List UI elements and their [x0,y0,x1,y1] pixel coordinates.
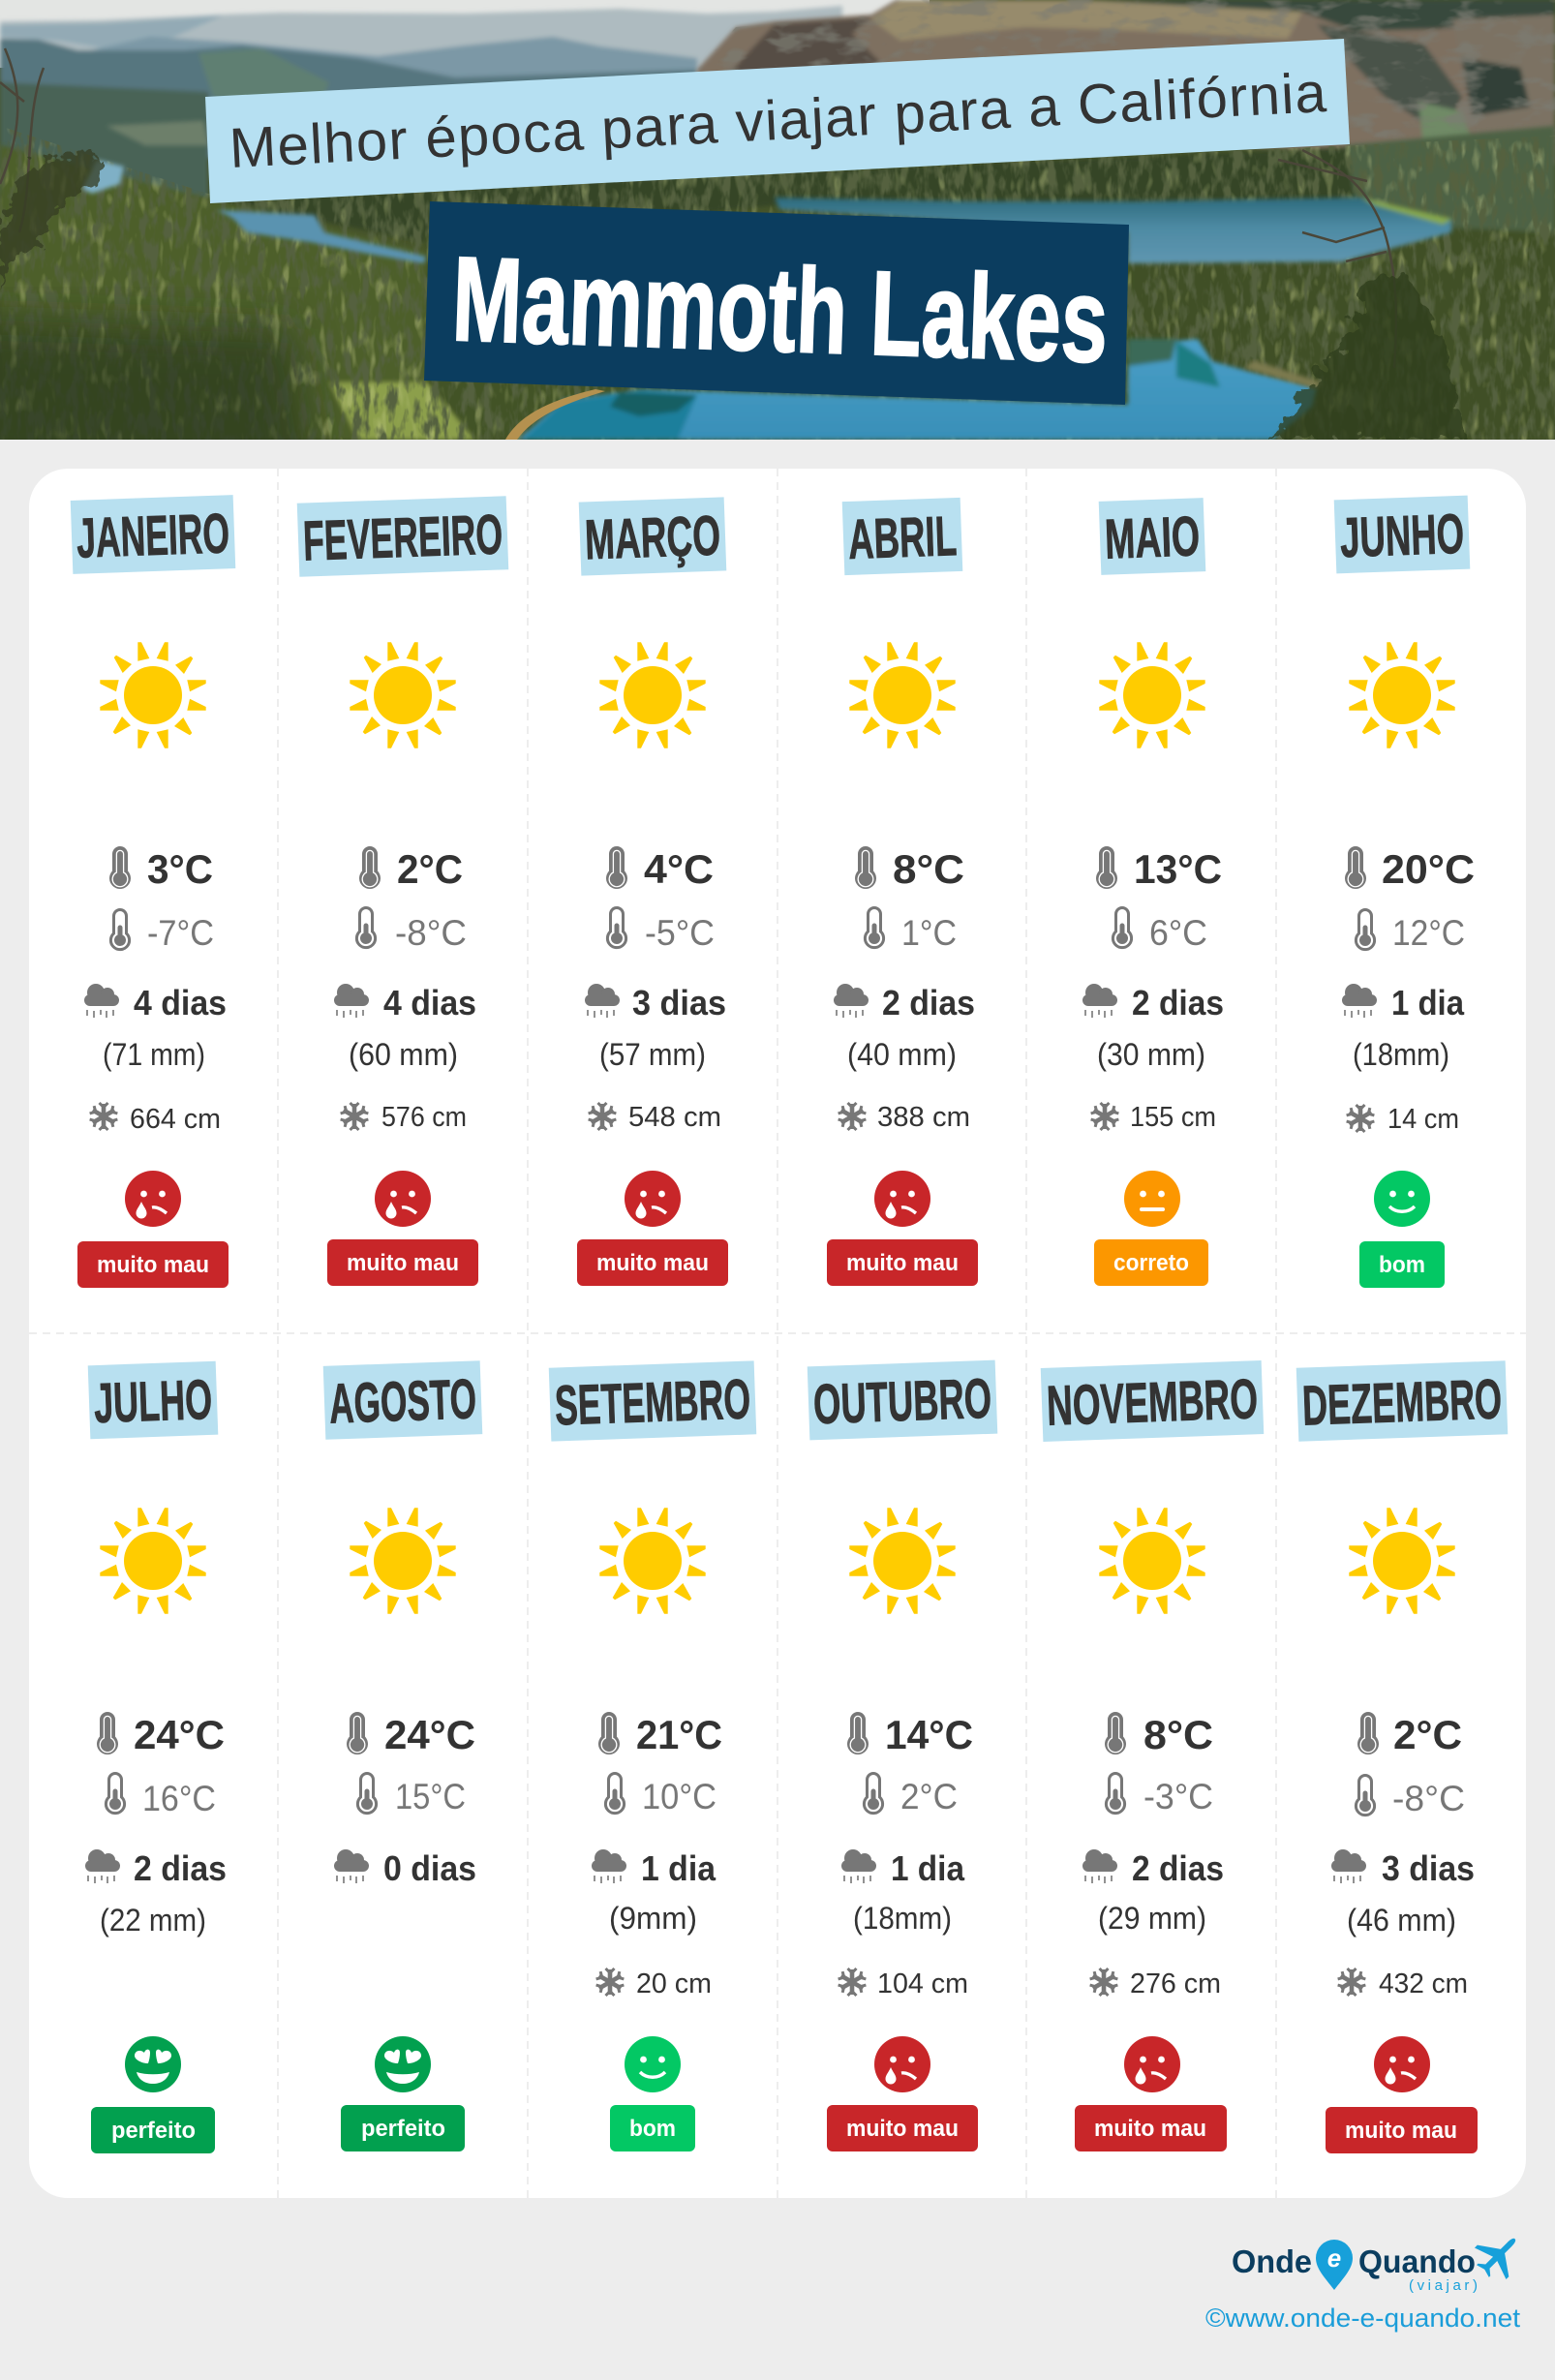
icon: thermometer high [1345,846,1366,889]
icon: thermometer low [1356,1776,1375,1816]
rainfall: (71 mm) [103,1037,205,1072]
rain days: 4 dias [383,983,476,1022]
destination heading [424,201,1129,405]
panel: outubro [808,1360,997,2151]
foreground tree left [0,48,45,184]
rating badge: muito mau [596,1250,709,1276]
icon: thermometer high [606,846,627,889]
high temperature: 20°C [1382,846,1475,892]
month heading [549,1360,756,1442]
icon: rating face [874,2036,930,2092]
icon: thermometer high [97,1712,118,1754]
rating badge [1094,1239,1208,1286]
low temperature: -7°C [147,913,214,953]
panel: julho [85,1361,227,2153]
icon: rating face [1374,2036,1430,2092]
rating badge: muito mau [347,1250,459,1276]
high temperature: 21°C [636,1712,722,1757]
icon: thermometer high [855,846,876,889]
icon: snow [596,1968,624,1996]
rain days: 2 dias [134,1848,227,1888]
low temperature: 6°C [1149,913,1207,953]
month heading [1334,496,1470,573]
icon: rain [1331,1849,1366,1883]
month heading [808,1360,997,1440]
rating badge: muito mau [97,1252,209,1278]
high temperature: 13°C [1134,846,1222,892]
logo: Onde e Quando [1232,2223,1531,2294]
rating badge: perfeito [111,2118,196,2144]
panel: janeiro [71,495,235,1288]
icon: sun [599,1508,706,1614]
low temperature: -8°C [1392,1779,1465,1818]
low temperature: 16°C [142,1779,216,1818]
icon: rating face [1124,2036,1180,2092]
snowfall: 432 cm [1379,1968,1468,1999]
month heading [71,495,235,574]
high temperature: 2°C [397,846,463,892]
low temperature: -5°C [645,913,715,953]
low temperature: 12°C [1392,913,1465,953]
snowfall: 14 cm [1387,1104,1459,1135]
icon: thermometer high [598,1712,620,1754]
month heading: ABRIL [847,504,958,571]
icon: thermometer high [1357,1712,1379,1754]
rain days: 4 dias [134,983,227,1022]
month heading [1041,1360,1264,1442]
high temperature: 3°C [147,846,213,892]
high temperature: 4°C [644,846,714,892]
rating badge: perfeito [361,2116,445,2142]
month heading: NOVEMBRO [1046,1367,1259,1438]
icon: rating face [1374,1171,1430,1227]
foreground tree right [1278,149,1394,277]
icon: thermometer high [109,846,131,889]
snowfall: 664 cm [130,1104,221,1135]
icon: sun [599,642,706,748]
icon: sun [1099,1508,1205,1614]
low temperature: -3°C [1143,1777,1213,1816]
forest texture [0,128,1555,440]
icon: sun [350,642,456,748]
icon: rain [84,984,119,1018]
month heading [579,497,726,576]
icon: rain [841,1849,876,1883]
destination name: Mammoth Lakes [450,232,1110,388]
rating badge [327,1239,478,1286]
rainfall: (30 mm) [1097,1037,1205,1072]
rating badge: muito mau [846,2116,959,2142]
month heading [297,496,508,577]
icon: thermometer high [1096,846,1117,889]
icon: plane [1467,2223,1531,2287]
icon: rain [85,1849,120,1883]
snowfall: 388 cm [877,1102,970,1133]
high temperature: 8°C [1143,1712,1213,1757]
panel: calendar card [29,469,1526,2198]
title text: Melhor época para viajar para a Califórnia [228,61,1328,180]
icon: snow [1347,1105,1374,1132]
icon: rain [585,984,620,1018]
rating badge [1326,2107,1478,2153]
low temperature: 1°C [901,913,957,953]
icon: snow [838,1103,866,1130]
snowfall: 276 cm [1130,1968,1221,1999]
icon: rating face [874,1171,930,1227]
website url: ©www.onde-e-quando.net [1205,2304,1521,2333]
rating badge: bom [629,2116,676,2142]
lakes [82,160,1452,440]
icon: thermometer low [605,1774,625,1814]
high temperature: 24°C [134,1712,225,1757]
icon: thermometer low [110,910,130,950]
icon: thermometer low [865,908,884,948]
snowfall: 548 cm [628,1102,721,1133]
low temperature: -8°C [395,913,467,953]
icon: rain [334,1849,369,1883]
low temperature: 15°C [395,1777,466,1816]
panel: novembro [1041,1360,1264,2151]
icon: map pin [1316,2240,1353,2290]
month heading: JANEIRO [76,502,230,570]
rating badge [827,1239,978,1286]
month heading: AGOSTO [328,1367,477,1436]
logo: Onde e Quando: Onde [1232,2243,1312,2279]
month heading [842,498,962,575]
month heading [323,1360,482,1440]
rainfall: (60 mm) [349,1037,458,1072]
icon: rating face [375,2036,431,2092]
low temperature: 2°C [900,1777,958,1816]
icon: thermometer low [357,1774,377,1814]
panel: dezembro [1296,1360,1508,2153]
rainfall: (57 mm) [599,1037,706,1072]
logo: Onde e Quando: Quando [1358,2243,1476,2279]
rain days: 2 dias [1132,983,1224,1022]
rain days: 2 dias [1132,1848,1224,1888]
icon: sun [100,642,206,748]
icon: thermometer low [864,1774,883,1814]
snowfall: 155 cm [1130,1102,1216,1133]
low temperature: 10°C [642,1777,717,1816]
high temperature: 8°C [893,846,964,892]
snowfall: 20 cm [636,1968,712,1999]
month heading [88,1361,218,1439]
panel: fevereiro [297,496,508,1286]
icon: rating face [125,2036,181,2092]
icon: thermometer low [607,908,626,948]
icon: rating face [625,1171,681,1227]
rain days: 1 dia [641,1848,717,1888]
icon: snow [90,1103,117,1130]
icon: rain [334,984,369,1018]
icon: sun [100,1508,206,1614]
rating badge [1075,2105,1227,2151]
panel: agosto [323,1360,482,2151]
icon: sun [849,1508,956,1614]
high temperature: 14°C [885,1712,973,1757]
month heading: MAIO [1104,504,1201,571]
rainfall: (9mm) [609,1901,697,1936]
icon: rain [1082,1849,1117,1883]
rainfall: (40 mm) [847,1037,957,1072]
rating badge [91,2107,215,2153]
rating badge [1359,1241,1445,1288]
icon: snow [1338,1968,1365,1996]
icon: rating face [125,1171,181,1227]
high temperature: 2°C [1393,1712,1462,1757]
icon: sun [849,642,956,748]
icon: thermometer high [347,1712,368,1754]
rain days: 3 dias [632,983,726,1022]
icon: sun [1349,642,1455,748]
rating badge [341,2105,465,2151]
icon: snow [341,1103,368,1130]
month heading: JUNHO [1339,503,1465,569]
logo: Onde e Quando: (viajar) [1409,2277,1478,2294]
rainfall: (29 mm) [1098,1901,1206,1936]
month heading: FEVEREIRO [302,503,503,573]
rating badge: muito mau [1345,2118,1457,2144]
icon: rating face [625,2036,681,2092]
rainfall: (22 mm) [100,1903,206,1938]
high temperature: 24°C [384,1712,475,1757]
panel: março [577,497,728,1286]
icon: rain [834,984,869,1018]
icon: rain [1342,984,1377,1018]
icon: snow [1091,1103,1118,1130]
rating badge [827,2105,978,2151]
snowfall: 576 cm [381,1102,467,1133]
icon: thermometer low [356,908,376,948]
icon: map pin: e [1327,2243,1341,2273]
icon: thermometer low [1356,910,1375,950]
rain days: 0 dias [383,1848,476,1888]
icon: rain [1082,984,1117,1018]
icon: sun [1099,642,1205,748]
month heading [1099,498,1205,575]
panel: setembro [549,1360,756,2151]
icon: snow [838,1968,866,1996]
rating badge: muito mau [846,1250,959,1276]
rain days: 2 dias [882,983,975,1022]
snowfall: 104 cm [877,1968,968,1999]
icon: thermometer low [1106,1774,1125,1814]
month heading: OUTUBRO [812,1367,992,1436]
panel: abril [827,498,978,1286]
title band [205,39,1350,203]
month heading: JULHO [93,1368,213,1435]
rain days: 3 dias [1382,1848,1475,1888]
rating badge [610,2105,695,2151]
panel: maio [1082,498,1224,1286]
rain days: 1 dia [1391,983,1465,1022]
rating badge: correto [1113,1250,1189,1276]
rating badge: bom [1379,1252,1425,1278]
panel: junho [1334,496,1475,1288]
icon: rating face [1124,1171,1180,1227]
icon: rain [592,1849,626,1883]
rainfall: (18mm) [853,1901,952,1936]
rain days: 1 dia [891,1848,965,1888]
month heading: MARÇO [584,504,721,571]
icon: thermometer high [847,1712,869,1754]
icon: thermometer high [359,846,381,889]
rainfall: (18mm) [1353,1037,1449,1072]
icon: thermometer high [1105,1712,1126,1754]
hero photo: mountain lakes and forest [0,0,1555,484]
icon: snow [589,1103,616,1130]
icon: rating face [375,1171,431,1227]
icon: thermometer low [1113,908,1132,948]
rating badge [77,1241,229,1288]
month heading: SETEMBRO [554,1367,751,1438]
icon: sun [1349,1508,1455,1614]
icon: sun [350,1508,456,1614]
rating badge [577,1239,728,1286]
rating badge: muito mau [1094,2116,1206,2142]
icon: thermometer low [106,1774,125,1814]
icon: snow [1090,1968,1117,1996]
rainfall: (46 mm) [1347,1903,1456,1938]
